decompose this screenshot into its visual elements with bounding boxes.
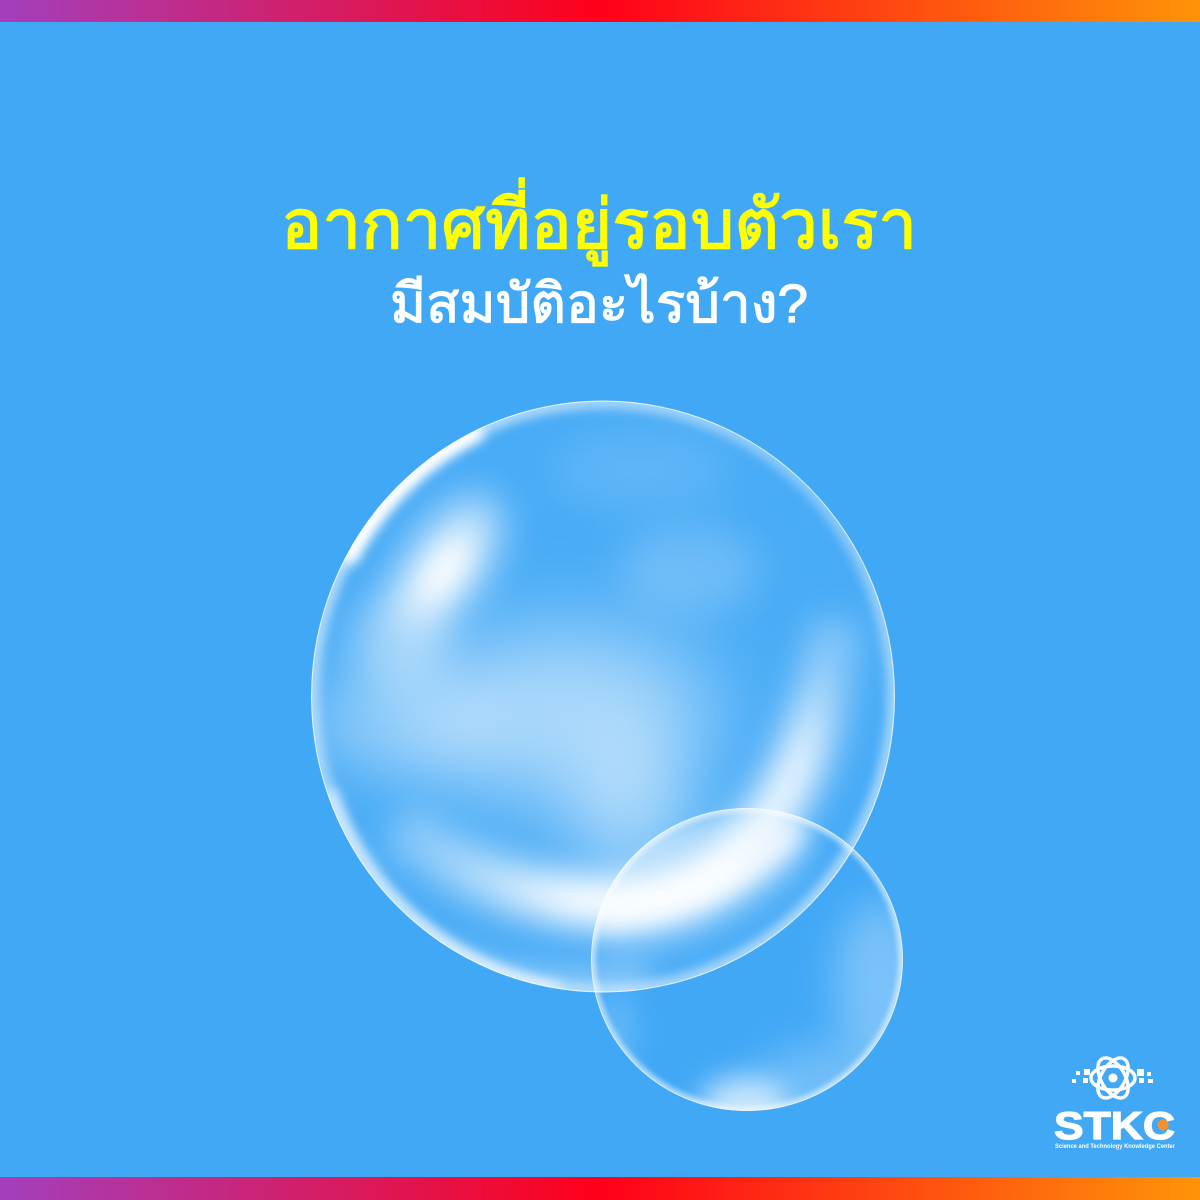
logo: STKC <box>1054 1053 1176 1150</box>
small bubble rim <box>592 809 902 1110</box>
small bubble bottom haze <box>700 1077 790 1133</box>
icon: atom <box>1072 1053 1153 1103</box>
central haze <box>415 630 715 800</box>
logo tagline: Science and Technology Knowledge Center <box>1055 1144 1176 1150</box>
rim glow <box>312 402 894 992</box>
small bubble overlap sheen <box>591 825 800 915</box>
small bubble right haze <box>835 900 925 1070</box>
title line 1: อากาศที่อยู่รอบตัวเรา <box>281 178 917 266</box>
bottom gradient bar <box>0 1177 1200 1200</box>
large bubble <box>310 400 895 992</box>
logo wordmark: STKC <box>1054 1105 1175 1148</box>
highlight spot <box>368 478 522 652</box>
title line 2: มีสมบัติอะไรบ้าง? <box>390 273 808 334</box>
title <box>281 178 917 334</box>
left haze <box>350 590 450 690</box>
lower crescent <box>395 620 838 903</box>
orange dot <box>1158 1120 1168 1130</box>
small bubble <box>591 808 903 1111</box>
top gradient bar <box>0 0 1200 22</box>
